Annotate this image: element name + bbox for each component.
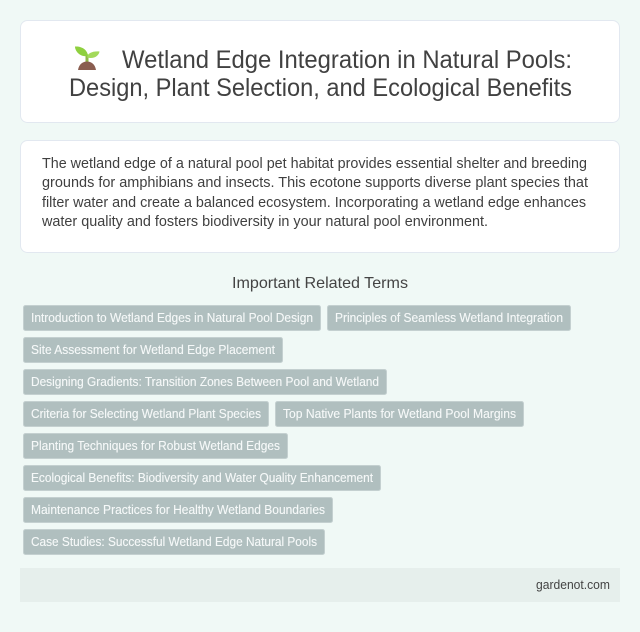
heading: related terms: Important Related Terms bbox=[232, 275, 408, 292]
tag bbox=[24, 466, 380, 490]
title text: Wetland Edge Integration in Natural Pools: bbox=[122, 46, 572, 74]
paragraph text bbox=[41, 155, 589, 230]
tag: Criteria for Selecting Wetland Plant Species bbox=[31, 407, 261, 421]
tag bbox=[24, 434, 288, 458]
tag: Maintenance Practices for Healthy Wetland Boundaries bbox=[31, 503, 325, 517]
tag: Principles of Seamless Wetland Integration bbox=[335, 311, 563, 325]
icon: seedling bbox=[75, 46, 100, 70]
tag: Planting Techniques for Robust Wetland Edges bbox=[31, 439, 280, 453]
panel: title card bbox=[20, 20, 620, 122]
tag bbox=[24, 370, 386, 394]
title text: Design, Plant Selection, and Ecological Benefits bbox=[69, 74, 572, 102]
panel: intro paragraph bbox=[20, 140, 620, 252]
paragraph text: The wetland edge of a natural pool pet habitat provides essential shelter and breeding bbox=[42, 155, 587, 172]
tag: Introduction to Wetland Edges in Natural Pool Design bbox=[31, 311, 313, 325]
footer credit: gardenot.com bbox=[536, 578, 610, 592]
paragraph text: grounds for amphibians and insects. This ecotone supports diverse plant species that bbox=[42, 174, 589, 191]
tag: Case Studies: Successful Wetland Edge Natural Pools bbox=[31, 535, 317, 549]
tag bbox=[24, 498, 332, 522]
title text bbox=[69, 46, 572, 102]
footer bar bbox=[20, 568, 620, 602]
paragraph text: water quality and fosters biodiversity in your natural pool environment. bbox=[41, 213, 488, 230]
tag: Designing Gradients: Transition Zones Between Pool and Wetland bbox=[31, 375, 379, 389]
tag list bbox=[24, 306, 570, 554]
tag bbox=[24, 402, 268, 426]
paragraph text: filter water and create a balanced ecosystem. Incorporating a wetland edge enhances bbox=[42, 194, 586, 211]
tag bbox=[328, 306, 570, 330]
tag bbox=[276, 402, 524, 426]
tag bbox=[24, 338, 282, 362]
tag: Top Native Plants for Wetland Pool Margins bbox=[283, 407, 516, 421]
tag: Ecological Benefits: Biodiversity and Water Quality Enhancement bbox=[31, 471, 373, 485]
tag: Site Assessment for Wetland Edge Placement bbox=[31, 343, 276, 357]
tag bbox=[24, 530, 324, 554]
tag bbox=[24, 306, 320, 330]
